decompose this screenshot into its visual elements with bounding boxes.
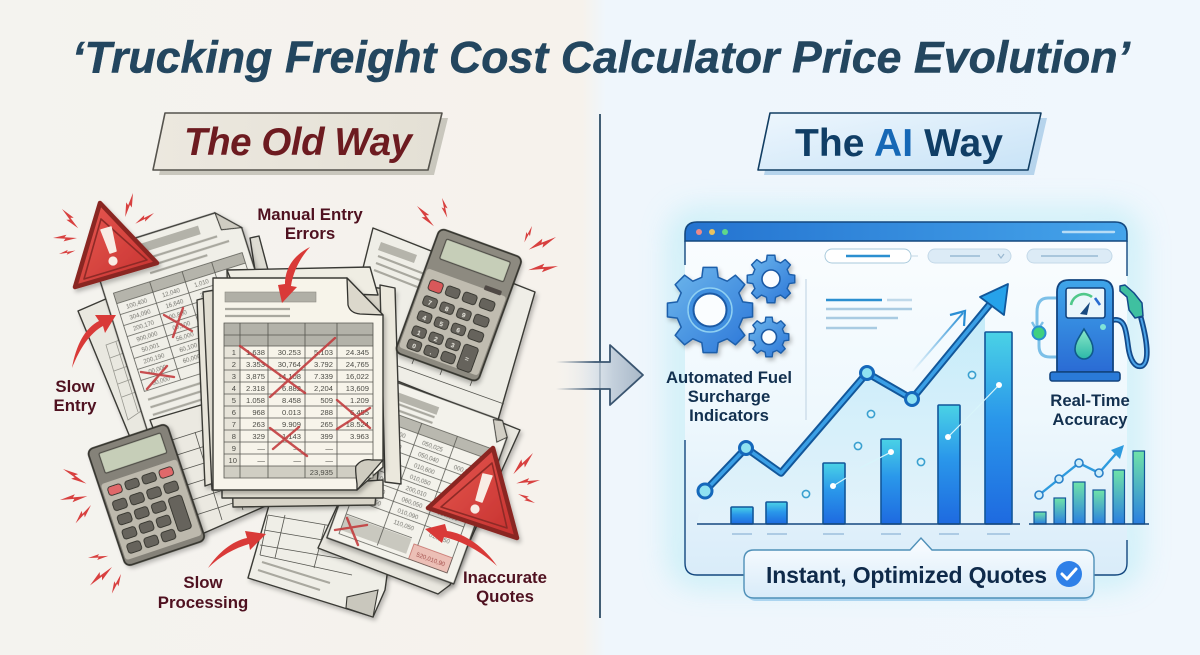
document: tilted table lower right: 00,000: [387, 428, 407, 440]
table figures: 24,765: [346, 360, 369, 369]
document: tilted table top left: 00,000: [148, 365, 168, 376]
arrow: old to AI: [556, 345, 643, 405]
table figures: [229, 348, 369, 477]
table figures: 3.792: [314, 360, 333, 369]
table figures: 399: [320, 432, 333, 441]
table figures: 24.345: [346, 348, 369, 357]
icon: calculator top right: [395, 228, 523, 382]
sheet right behind calculator: [340, 228, 535, 420]
document: tilted table top left: 1,010: [194, 279, 210, 289]
icon: calculator top right: 2: [433, 336, 439, 344]
document: tilted table lower right: 010,090: [396, 508, 419, 522]
table figures: —: [257, 456, 265, 465]
table figures: 509: [320, 396, 333, 405]
table figures: 14,108: [278, 372, 301, 381]
red cross on lower table: [335, 518, 367, 545]
label: slow processing: Slow: [183, 573, 223, 592]
table figures: 9: [232, 444, 236, 453]
chart: mini bars and trend: [1029, 445, 1149, 524]
sheet under bottom calculator: [150, 395, 268, 537]
chart: main growth chart: [697, 284, 1020, 534]
icon: calculator top right: 1: [416, 330, 422, 338]
heading: The AI Way: The AI Way: [795, 122, 1003, 165]
callout: instant optimized quotes: Instant, Optimized Quotes: [766, 562, 1047, 588]
document: tilted table top left: 304,090: [129, 309, 152, 322]
table figures: 10: [229, 456, 237, 465]
trend line with arrowhead: [698, 284, 1008, 498]
label: manual entry errors: Errors: [285, 224, 335, 243]
table figures: 2: [232, 360, 236, 369]
document: tilted table top left: 56,000: [175, 332, 195, 343]
icon: calculator top right: .: [429, 349, 433, 357]
document: tilted table top left: 00,800: [169, 310, 188, 321]
table figures: 3: [232, 372, 236, 381]
document: tilted table top left: 100,400: [126, 298, 149, 311]
document: tilted table top left: 60,100: [179, 343, 199, 354]
table figures: 4: [232, 384, 236, 393]
document: tilted table lower right: 00,000: [379, 451, 398, 463]
table figures: 7.339: [314, 372, 333, 381]
label: inaccurate quotes: Inaccurate: [463, 568, 547, 587]
title: ‘Trucking Freight Cost Calculator Price Evolution’: [72, 34, 1131, 82]
document: bottom sheet: [248, 495, 396, 617]
document: tilted table lower right: 060,050: [400, 497, 423, 510]
table figures: 8: [232, 432, 236, 441]
table figures: 23,935: [310, 468, 333, 477]
document: tilted table lower right: 200,010: [404, 486, 428, 499]
table figures: 265: [320, 420, 333, 429]
table figures: 18.524: [346, 420, 369, 429]
label: automated fuel surcharge indicators: Surcharge: [688, 387, 770, 406]
page curl: [356, 460, 383, 490]
arrow: slow entry: [72, 315, 116, 368]
table figures: 30,764: [278, 360, 301, 369]
document: tilted table top left: 16,640: [165, 299, 185, 310]
table figures: —: [325, 456, 333, 465]
lollipop markers: [802, 371, 976, 523]
document: tilted table lower right: 200,00: [446, 488, 466, 500]
label: slow entry: Slow: [55, 377, 95, 396]
panel: the AI way: [666, 113, 1149, 601]
icon: calculator top right: 3: [450, 342, 456, 350]
heading: The Old Way: [153, 113, 448, 175]
icon: calculator top right: =: [464, 356, 470, 364]
document: tilted table top left: 50,001: [141, 343, 161, 354]
label: real-time accuracy: Real-Time: [1050, 391, 1130, 410]
icon: calculator top right: 4: [421, 315, 427, 323]
label: automated fuel surcharge indicators: Automated Fuel: [666, 368, 792, 387]
table figures: 3.353: [246, 360, 265, 369]
label: automated fuel surcharge indicators: Indicators: [689, 406, 769, 425]
icon: gears: [667, 255, 795, 357]
sheet behind left: [78, 298, 175, 510]
document: tilted table top left: 900,000: [136, 331, 159, 344]
main page fold: [347, 278, 383, 315]
heading: The AI Way: [758, 113, 1047, 175]
label: real-time accuracy: Accuracy: [1052, 410, 1128, 429]
icon: warning triangle top left: [75, 203, 157, 287]
red crosses on tilted table: [141, 308, 192, 389]
table figures: 3,875: [246, 372, 265, 381]
document: tilted table lower right: 010,050: [428, 533, 451, 546]
table figures: 8.458: [282, 396, 301, 405]
table figures: 2,204: [314, 384, 333, 393]
document: tilted table lower right: 520,010,90: [415, 553, 446, 569]
table figures: —: [325, 444, 333, 453]
back page lower right: [318, 380, 520, 594]
document: tilted table top left: 00,100: [172, 321, 192, 332]
icon: warning triangle lower right: [428, 448, 517, 538]
icon: fuel pump: [1032, 280, 1147, 381]
document: tilted table lower right: [327, 378, 512, 584]
icon: calculator top right: 5: [438, 321, 444, 329]
table figures: 288: [320, 408, 333, 417]
bars: [731, 332, 1012, 524]
document: tilted table lower right: 60,050: [383, 440, 403, 452]
document: tilted table top left: [91, 207, 292, 433]
heading: The Old Way: The Old Way: [184, 121, 415, 164]
icon: calculator top right: 8: [444, 306, 450, 314]
table figures: 1: [232, 348, 236, 357]
document: tilted table top left: 200,170: [133, 320, 156, 333]
icon: calculator bottom left: [87, 423, 206, 567]
table figures: 30.253: [278, 348, 301, 357]
table figures: 1.209: [350, 396, 369, 405]
document: tilted table lower right: 050,000: [436, 510, 459, 523]
table figures: 1.058: [246, 396, 265, 405]
table figures: 13,609: [346, 384, 369, 393]
thin trend arrow: [912, 311, 965, 372]
table figures: 16,022: [346, 372, 369, 381]
arrow: inaccurate quotes: [425, 524, 497, 566]
table figures: 2.318: [246, 384, 265, 393]
document: tilted table top left: 00,000: [152, 376, 172, 387]
table figures: 5: [232, 396, 236, 405]
table figures: 6.882: [282, 384, 301, 393]
document: tilted table top left: 200: [200, 291, 212, 300]
table figures: 6.455: [350, 408, 369, 417]
lightning bolts: [53, 192, 559, 595]
callout: instant optimized quotes: [744, 538, 1094, 601]
document: tilted table lower right: 000,090: [453, 465, 476, 478]
label: inaccurate quotes: Quotes: [476, 587, 534, 606]
window title bar: [685, 222, 1127, 241]
panel: the old way: [53, 113, 559, 617]
icon: calculator top right: 6: [455, 327, 461, 335]
document: tilted table lower right: 050,040: [417, 452, 440, 465]
icon: calculator top right: 9: [460, 312, 467, 320]
document: tilted table lower right: 00,050: [366, 485, 386, 497]
table figures: 9.909: [282, 420, 301, 429]
label: manual entry errors: Manual Entry: [257, 205, 363, 224]
table figures: 329: [252, 432, 265, 441]
table figures: 5.103: [314, 348, 333, 357]
icon: calculator top right: 0: [411, 343, 417, 351]
table figures: —: [293, 444, 301, 453]
arrow: slow processing: [208, 531, 266, 568]
table figures: 3.963: [350, 432, 369, 441]
document: tilted table top left: 60,000: [182, 354, 202, 365]
filter pills: [825, 249, 1112, 263]
document: tilted table top left: 200,190: [143, 353, 166, 366]
axis ticks: [732, 533, 1010, 535]
sheet back edge: [250, 236, 272, 290]
arrow: manual entry errors: [278, 247, 310, 303]
icon: check badge: [1056, 561, 1082, 587]
label: slow entry: Entry: [54, 396, 97, 415]
document: tilted table lower right: 00,000: [374, 462, 394, 474]
document: tilted table lower right: 010,600: [413, 463, 436, 477]
label: slow processing: Processing: [158, 593, 248, 612]
table figures: 0.013: [282, 408, 301, 417]
table figures: 1.638: [246, 348, 265, 357]
document: tilted table lower right: 01,050: [362, 496, 382, 508]
table figures: 1.143: [282, 432, 301, 441]
document: tilted table lower right: 00,000: [370, 473, 390, 486]
icon: calculator top right: 7: [427, 300, 433, 308]
document: main cost table stack: [197, 267, 401, 507]
table figures: —: [293, 456, 301, 465]
document: tilted table lower right: 110,050: [392, 520, 415, 533]
center divider: [599, 114, 601, 618]
document: tilted table lower right: 050,025: [421, 441, 444, 454]
document: tilted table lower right: 010,050: [409, 475, 432, 488]
window glow: [682, 222, 1128, 574]
red crosses on main table: [240, 338, 370, 456]
table figures: 6: [232, 408, 236, 417]
text placeholder lines: [826, 300, 912, 328]
table figures: 7: [232, 420, 236, 429]
app window: [685, 222, 1127, 575]
document: tilted table top left: 12,040: [162, 288, 182, 299]
table figures: 263: [252, 420, 265, 429]
highlight data sparks: [830, 382, 1002, 489]
table figures: —: [257, 444, 265, 453]
table figures: 968: [252, 408, 265, 417]
